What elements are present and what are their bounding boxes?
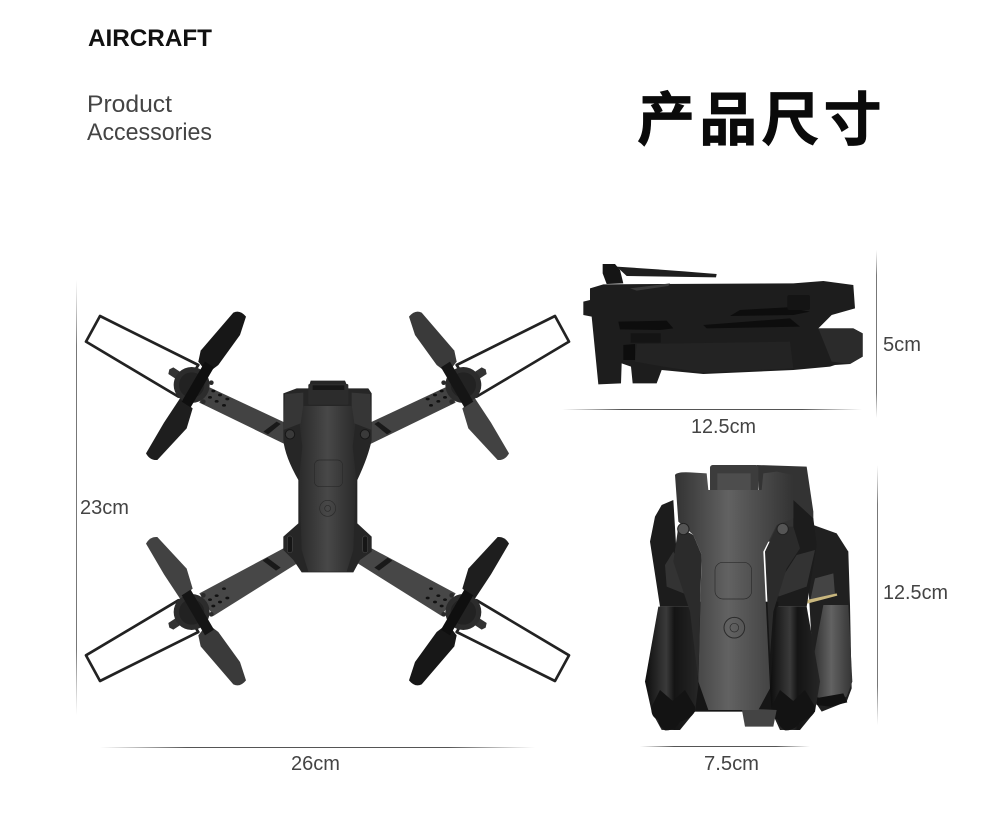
dimension: folded length: 12.5cm bbox=[883, 582, 948, 604]
arms bbox=[199, 386, 456, 616]
rotor: bottom right bbox=[409, 537, 569, 685]
title: 产品尺寸 bbox=[637, 88, 886, 153]
dimension: height of unfolded drone: 23cm bbox=[80, 497, 129, 519]
rotor: top right bbox=[409, 312, 569, 460]
dimension: folded width: 7.5cm bbox=[704, 753, 759, 775]
dimension: width of unfolded drone: 26cm bbox=[291, 753, 340, 775]
rear folded layer bbox=[757, 465, 852, 712]
rotor: bottom left bbox=[86, 537, 246, 685]
folded blades bbox=[645, 607, 820, 730]
dimension: folded height: 5cm bbox=[883, 334, 921, 356]
camera bbox=[818, 328, 863, 364]
drone: folded top view bbox=[645, 465, 852, 730]
drone: unfolded top view bbox=[86, 312, 569, 685]
subtitle: product accessories bbox=[87, 91, 212, 146]
body silhouette bbox=[583, 281, 863, 384]
folded arms bbox=[650, 500, 817, 607]
brand logo: AIRCRAFT bbox=[88, 25, 212, 52]
lower arm bbox=[635, 342, 793, 373]
rotor: top left bbox=[86, 312, 246, 460]
drone: folded side view bbox=[583, 264, 863, 384]
dark detail slots bbox=[618, 283, 810, 360]
body backing bbox=[692, 602, 778, 712]
propeller on top bbox=[603, 264, 717, 284]
camera bbox=[710, 465, 758, 493]
dimension: folded side length: 12.5cm bbox=[691, 416, 756, 438]
subtitle: product accessories: Accessories bbox=[87, 119, 212, 146]
fuselage bbox=[283, 381, 372, 572]
fuselage bbox=[673, 472, 800, 727]
subtitle: product accessories: Product bbox=[87, 91, 172, 118]
